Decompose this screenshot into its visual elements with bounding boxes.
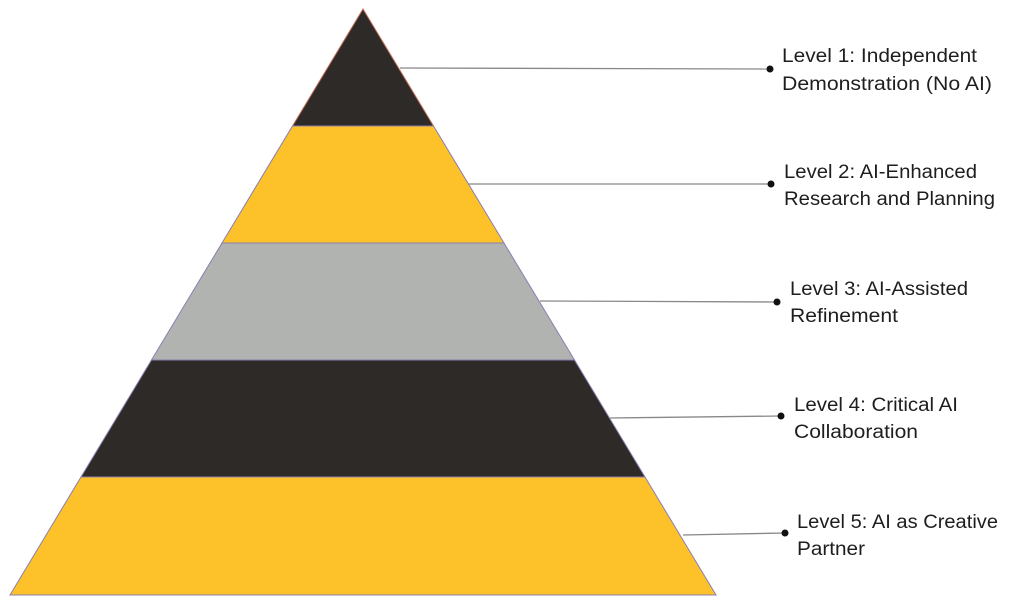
label: level 1 (400, 46, 992, 95)
level 3 band (152, 243, 574, 360)
label: level 3 (540, 279, 968, 327)
label: level 4: Level 4: Critical AI (794, 395, 958, 416)
label: level 3: Refinement (790, 306, 899, 327)
label: level 2 (468, 162, 995, 210)
label: level 5: Level 5: AI as Creative (797, 512, 998, 533)
label: level 2: Level 2: AI-Enhanced (784, 162, 977, 183)
level 4 band (81, 360, 645, 477)
pyramid (10, 9, 716, 595)
label: level 1: Demonstration (No AI) (782, 74, 992, 95)
level 1 band (292, 9, 434, 126)
label: level 4 (610, 395, 958, 443)
label: level 5: Partner (797, 539, 866, 560)
label: level 5 (683, 512, 998, 560)
label: level 4: Collaboration (794, 422, 918, 443)
label: level 2: Research and Planning (784, 189, 995, 210)
level 2 band (222, 126, 504, 243)
level 5 band (10, 477, 716, 595)
label: level 1: Level 1: Independent (782, 46, 978, 67)
label: level 3: Level 3: AI-Assisted (790, 279, 968, 300)
